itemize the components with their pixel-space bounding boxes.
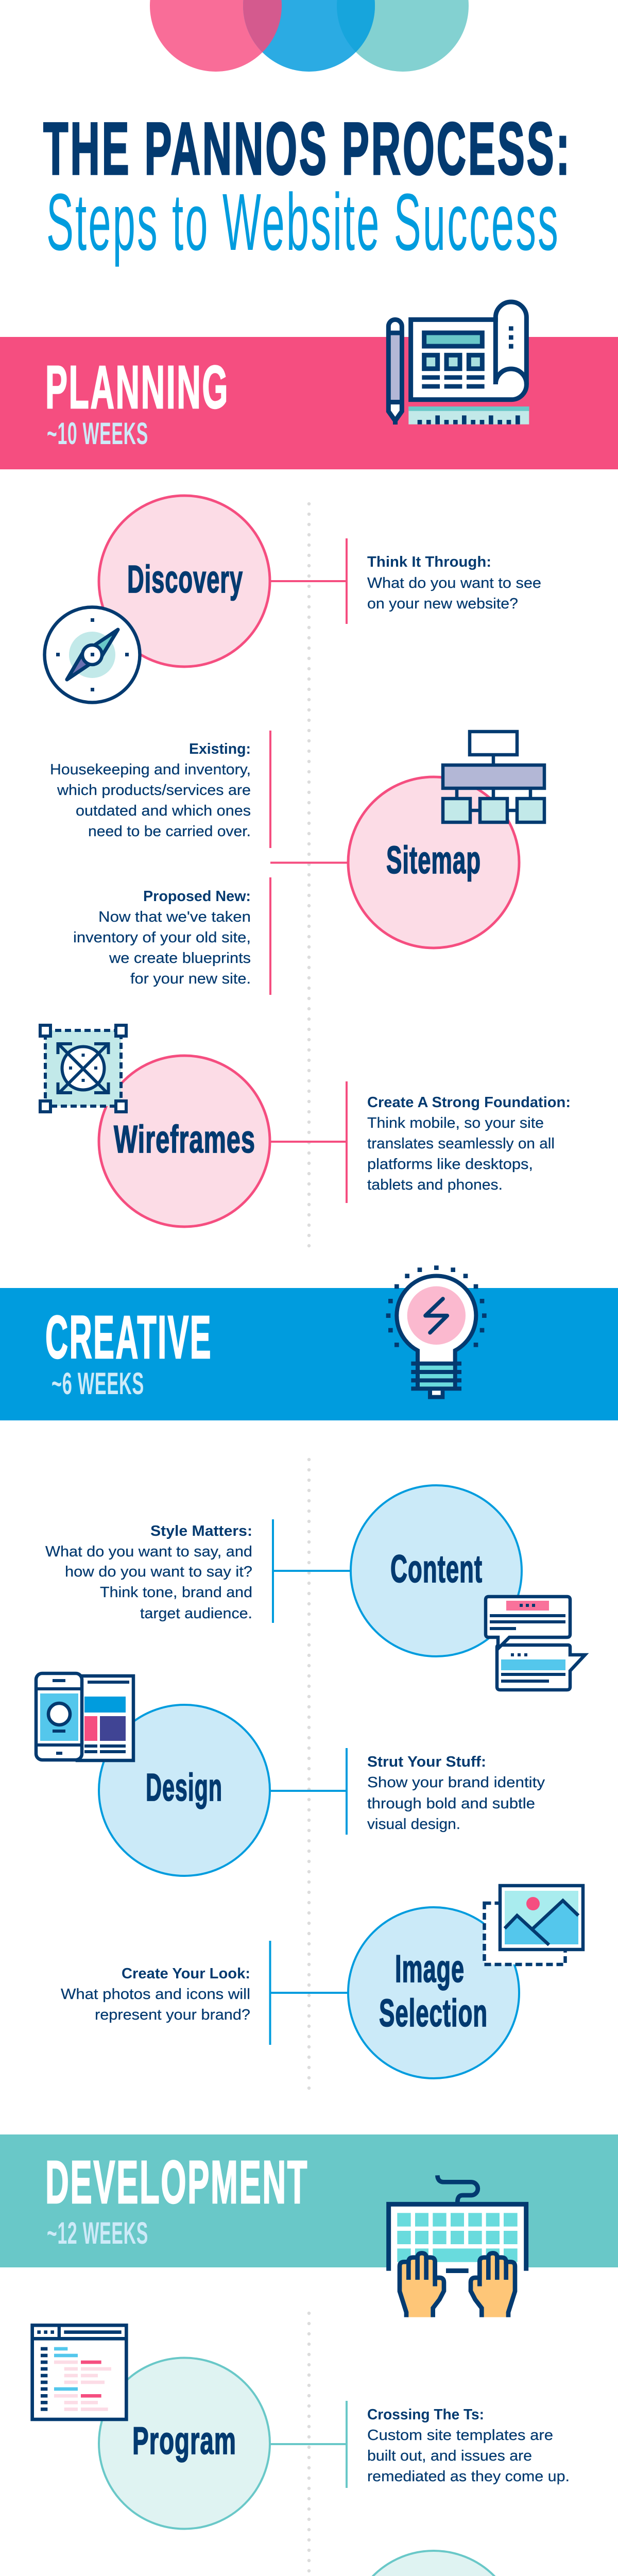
text: style matters — [45, 1523, 252, 1622]
text: think it through: What do you want to see — [367, 575, 541, 591]
connector — [270, 1941, 348, 2045]
heading: discovery: Discovery — [127, 557, 243, 601]
text: create your look: represent your brand? — [95, 2007, 250, 2023]
text: proposed new: inventory of your old site, — [73, 929, 251, 946]
text: think it through: Think It Through: — [367, 554, 491, 570]
text: crossing the ts: built out, and issues are — [367, 2448, 532, 2464]
text: proposed new: Now that we've taken — [98, 909, 251, 925]
connector — [270, 1748, 347, 1835]
icon: phone and tablet — [36, 1673, 133, 1760]
text: think it through — [367, 554, 541, 612]
text: create a strong foundation — [367, 1094, 571, 1193]
text: style matters: how do you want to say it? — [65, 1564, 252, 1580]
panel: discovery step — [44, 496, 541, 703]
heading: image selection: Selection — [379, 1991, 488, 2035]
heading: content: Content — [390, 1547, 483, 1590]
text: existing: Existing: — [189, 741, 251, 757]
connector — [273, 1519, 350, 1623]
heading: planning: PLANNING — [45, 353, 229, 421]
panel: creative band — [0, 1265, 618, 1420]
text: existing: which products/services are — [57, 782, 251, 799]
icon: keyboard and hands — [389, 2175, 526, 2317]
panel: planning band — [0, 302, 618, 469]
panel: program step — [32, 2325, 570, 2529]
icon: sitemap tree — [443, 732, 544, 822]
text: create a strong foundation: platforms like desktops, — [367, 1156, 533, 1173]
text: create your look: Create Your Look: — [122, 1965, 250, 1982]
text: create your look — [61, 1965, 250, 2023]
text: crossing the ts: Custom site templates are — [367, 2427, 553, 2444]
duration: 10 weeks: ~10 WEEKS — [47, 416, 148, 451]
heading: image selection — [379, 1947, 488, 2035]
text: existing: need to be carried over. — [88, 823, 251, 840]
panel: content step — [45, 1485, 585, 1690]
text: create your look: What photos and icons will — [61, 1986, 250, 2003]
text: style matters: target audience. — [140, 1605, 252, 1622]
text: think it through: on your new website? — [367, 596, 518, 612]
title — [43, 107, 572, 267]
icon: blueprint, pencil and ruler — [388, 302, 529, 425]
icon: code editor window — [32, 2325, 126, 2419]
icon: image frame — [484, 1886, 583, 1964]
text: proposed new: we create blueprints — [109, 950, 251, 967]
icon: compass — [44, 607, 140, 703]
panel: image selection step — [61, 1886, 583, 2078]
text: create a strong foundation: translates seamlessly on all — [367, 1136, 555, 1152]
text: proposed new: Proposed New: — [143, 888, 251, 905]
connector — [270, 731, 348, 995]
heading: design: Design — [146, 1766, 222, 1809]
icon: wireframe selection — [40, 1025, 126, 1112]
text: create a strong foundation: Create A Strong Foundation: — [367, 1094, 571, 1111]
text: style matters: Style Matters: — [150, 1523, 252, 1539]
text: crossing the ts: Crossing The Ts: — [367, 2406, 484, 2423]
text: proposed new — [73, 888, 251, 987]
heading: image selection: Image — [395, 1947, 465, 1990]
text: strut your stuff: visual design. — [367, 1816, 460, 1833]
text: crossing the ts — [367, 2406, 570, 2485]
heading: development: DEVELOPMENT — [45, 2148, 308, 2216]
heading: sitemap: Sitemap — [386, 838, 481, 882]
duration: 12 weeks: ~12 WEEKS — [47, 2216, 148, 2250]
text: proposed new: for your new site. — [130, 971, 251, 987]
text: existing: Housekeeping and inventory, — [50, 761, 251, 778]
panel: development band — [0, 2134, 618, 2317]
connector — [270, 538, 347, 624]
text: create a strong foundation: Think mobile, so your site — [367, 1115, 544, 1131]
heading: wireframes: Wireframes — [114, 1117, 255, 1161]
connector — [270, 2401, 347, 2488]
text: crossing the ts: remediated as they come up. — [367, 2468, 570, 2485]
panel: sitemap step — [50, 731, 544, 995]
heading: program: Program — [132, 2419, 236, 2462]
text: strut your stuff — [367, 1754, 545, 1833]
duration: 6 weeks: ~6 WEEKS — [52, 1366, 144, 1401]
heading: creative: CREATIVE — [45, 1303, 212, 1371]
text: strut your stuff: through bold and subtle — [367, 1795, 535, 1812]
icon: light bulb — [386, 1265, 487, 1399]
text: existing: outdated and which ones — [76, 803, 251, 819]
decorative top circles — [150, 0, 469, 72]
panel: design step — [36, 1673, 545, 1876]
text: style matters: Think tone, brand and — [100, 1584, 252, 1601]
panel: review step — [90, 2551, 587, 2576]
text: existing — [50, 741, 251, 840]
connector — [270, 1081, 347, 1203]
text: strut your stuff: Show your brand identity — [367, 1774, 545, 1791]
text: create a strong foundation: tablets and phones. — [367, 1177, 503, 1193]
text: strut your stuff: Strut Your Stuff: — [367, 1754, 486, 1770]
panel: wireframes step — [40, 1025, 571, 1227]
text: style matters: What do you want to say, and — [45, 1544, 252, 1560]
icon: chat bubbles — [486, 1597, 585, 1690]
